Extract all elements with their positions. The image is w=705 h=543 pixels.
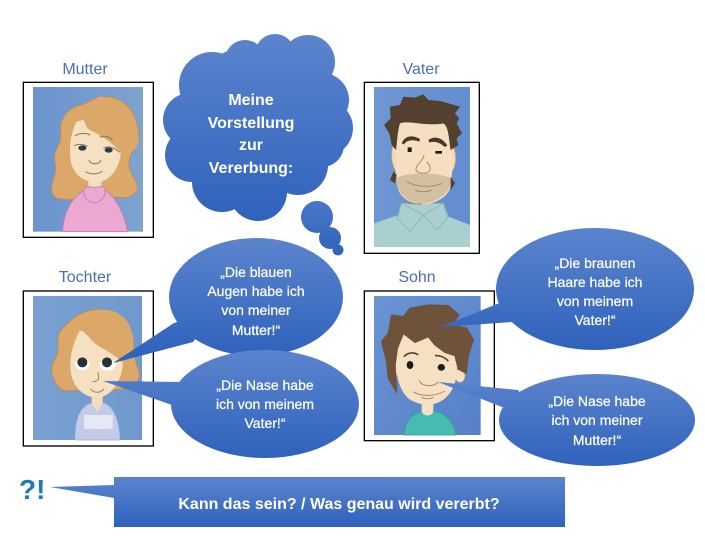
neck	[422, 402, 433, 415]
label: Tochter: Tochter	[59, 269, 112, 286]
bubble text: ich von meinem	[216, 396, 314, 412]
eyebrows	[402, 136, 447, 147]
shirt	[404, 412, 456, 435]
photo background	[33, 296, 142, 440]
bubble text: Augen habe ich	[207, 283, 305, 299]
nose and mouth	[91, 372, 104, 392]
callout shape	[50, 477, 565, 527]
face	[70, 120, 121, 182]
bubble text	[216, 377, 314, 431]
thought cloud	[163, 34, 353, 256]
speech bubble: nose from mother	[438, 374, 695, 466]
cloud text: zur	[239, 137, 263, 154]
callout box	[50, 477, 565, 527]
stubble	[396, 173, 451, 204]
bubble text	[548, 255, 642, 328]
picture frame	[23, 291, 153, 446]
picture frame	[364, 82, 479, 253]
sweater	[75, 403, 120, 440]
panel: Vater portrait	[364, 82, 479, 253]
fringe	[79, 310, 133, 363]
callout text: Kann das sein? / Was genau wird vererbt?	[178, 496, 500, 513]
eyebrows	[404, 353, 448, 361]
face	[395, 328, 457, 405]
cloud shape	[163, 34, 353, 221]
hair	[52, 309, 139, 391]
hair	[52, 97, 139, 199]
eyes	[78, 145, 86, 151]
face	[395, 122, 453, 204]
face	[70, 330, 123, 398]
neck	[92, 393, 103, 412]
panel: Tochter portrait	[23, 291, 153, 446]
bubble text: von meiner	[221, 302, 291, 318]
bubble shape	[113, 238, 343, 363]
eyes	[408, 147, 442, 154]
cloud text: Vererbung:	[209, 160, 293, 177]
panel: Sohn portrait	[364, 291, 494, 441]
photo background	[33, 87, 143, 232]
panel: Mutter portrait	[23, 82, 153, 237]
label: Vater: Vater	[402, 61, 440, 78]
eyes	[407, 361, 413, 369]
bubble text: Mutter!“	[573, 432, 621, 448]
bubble text	[548, 393, 646, 448]
bubble text: Vater!“	[575, 312, 616, 328]
ears	[387, 364, 397, 379]
sweater stripe	[84, 415, 113, 429]
speech bubble: brown hair	[440, 228, 694, 350]
bubble text: von meinem	[557, 293, 633, 309]
photo background	[374, 296, 481, 435]
sweater	[63, 190, 127, 232]
eyes	[75, 359, 89, 370]
hair	[384, 94, 462, 150]
bubble shape	[438, 374, 695, 466]
eyelids, nose and mouth	[74, 133, 120, 174]
speech bubble: blue eyes	[113, 238, 343, 363]
nose and mouth	[413, 380, 445, 399]
picture frame	[23, 82, 153, 237]
bubble text: Haare habe ich	[548, 274, 642, 290]
bubble text: „Die Nase habe	[548, 393, 646, 409]
cloud text: Vorstellung	[208, 115, 294, 132]
nose and mouth	[403, 155, 442, 204]
label: Sohn: Sohn	[398, 269, 436, 286]
bubble text: ich von meiner	[551, 412, 643, 428]
bubble text: „Die blauen	[220, 264, 292, 280]
bubble text: Mutter!“	[232, 322, 280, 338]
picture frame	[364, 291, 494, 441]
bubble text: „Die Nase habe	[216, 377, 314, 393]
photo background	[374, 87, 470, 247]
bubble text: „Die braunen	[555, 255, 635, 271]
shirt	[374, 203, 470, 247]
bubble text	[207, 264, 305, 338]
thought dots	[301, 201, 344, 256]
neck	[88, 178, 102, 195]
fringe	[84, 96, 139, 153]
cloud text	[208, 92, 294, 177]
bubble shape	[103, 350, 359, 458]
shirt collar	[397, 203, 447, 232]
sideburn stubble	[390, 172, 455, 190]
question mark icon: ?!	[19, 474, 45, 505]
label: Mutter: Mutter	[62, 61, 108, 78]
ears	[392, 147, 456, 172]
bubble text: Vater!“	[245, 415, 286, 431]
collar	[83, 186, 105, 203]
bubble shape	[440, 228, 694, 350]
hair	[382, 305, 473, 392]
speech bubble: nose from father	[103, 350, 359, 458]
cloud text: Meine	[228, 92, 274, 109]
